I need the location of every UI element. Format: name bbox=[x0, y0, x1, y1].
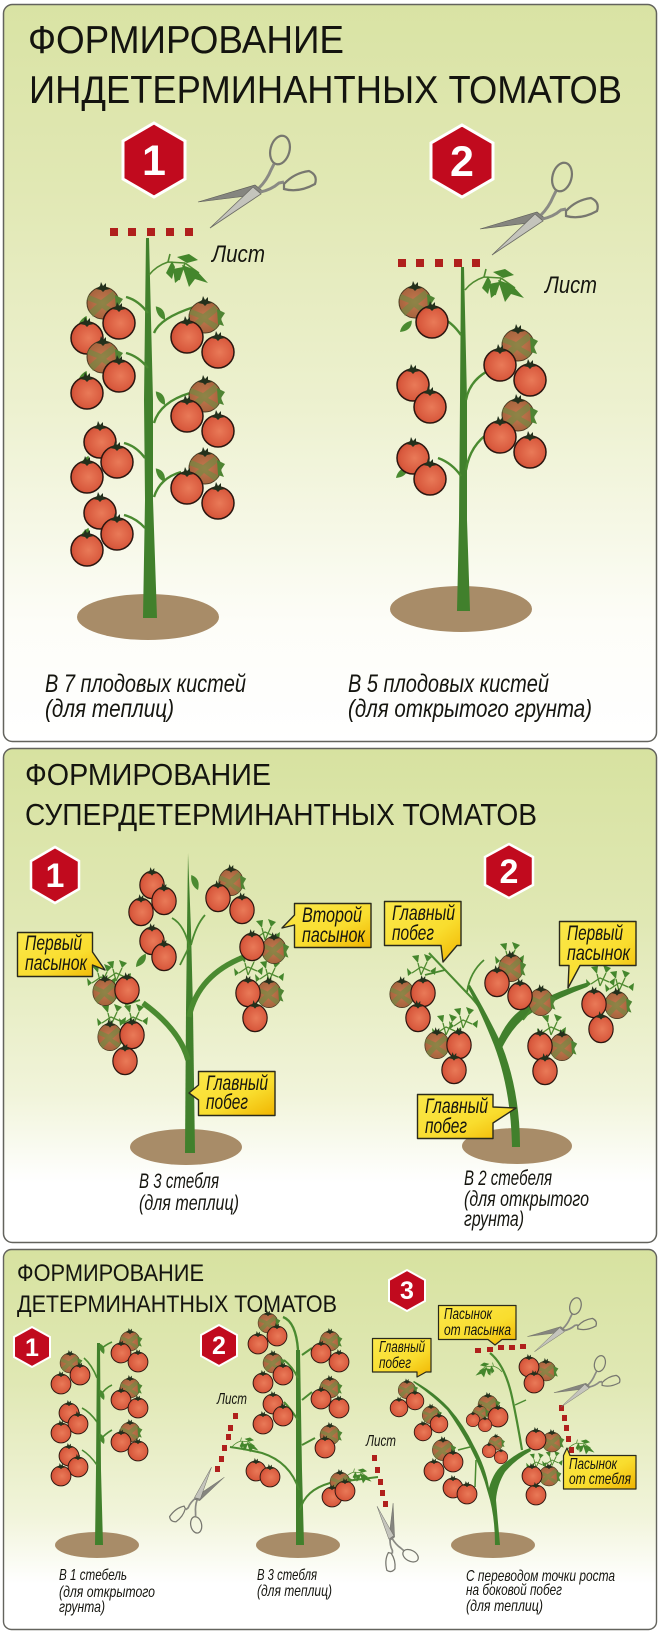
badge 2 bbox=[431, 125, 493, 197]
panel: indeterminate tomatoes bbox=[4, 4, 656, 742]
callout: stepson from stem: от стебля bbox=[569, 1471, 631, 1488]
callout: second stepson: пасынок bbox=[302, 924, 366, 947]
caption 1: В 1 стебель bbox=[59, 1567, 127, 1584]
ground 3 bbox=[451, 1532, 535, 1558]
ground 2 bbox=[462, 1128, 572, 1164]
heading: ДЕТЕРМИНАНТНЫХ ТОМАТОВ bbox=[17, 1291, 337, 1318]
tomatoes right bbox=[484, 324, 546, 468]
badge 2: 2 bbox=[212, 1332, 226, 1360]
plant 2 bbox=[158, 1310, 431, 1578]
heading bbox=[17, 1260, 337, 1318]
callout: stepson from stem: Пасынок bbox=[569, 1456, 618, 1473]
tomatoes left bbox=[397, 281, 448, 495]
leaf bbox=[149, 254, 208, 287]
heading bbox=[25, 757, 537, 832]
scissors 1 bbox=[198, 134, 316, 228]
panel background bbox=[4, 748, 656, 1242]
ground 2 bbox=[390, 586, 532, 632]
callout: main shoot: побег bbox=[206, 1091, 248, 1114]
callout: stepson of stepson: от пасынка bbox=[444, 1322, 511, 1339]
callout: main shoot bbox=[372, 1338, 431, 1377]
callout: first stepson: пасынок bbox=[25, 952, 88, 975]
caption 1: (для открытого bbox=[59, 1584, 155, 1601]
stem and branches bbox=[407, 942, 634, 1147]
badge 2: 2 bbox=[500, 853, 518, 891]
ground 1 bbox=[77, 594, 219, 640]
heading bbox=[28, 19, 622, 112]
tomatoes bbox=[93, 864, 289, 1075]
callout: main shoot bottom: побег bbox=[425, 1115, 467, 1138]
caption 1: В 3 стебля bbox=[139, 1170, 219, 1193]
scissors 2 bbox=[480, 161, 598, 255]
callout: first stepson right: Первый bbox=[567, 922, 623, 945]
caption 1 bbox=[139, 1170, 239, 1215]
badge 2 bbox=[485, 844, 533, 898]
callout: main shoot bottom: Главный bbox=[425, 1095, 488, 1118]
tomatoes bbox=[390, 950, 632, 1085]
cut line 2 bbox=[398, 259, 480, 267]
caption 2 bbox=[348, 670, 592, 723]
badge 1 bbox=[14, 1327, 50, 1367]
callout: main shoot bbox=[189, 1072, 275, 1116]
ground 2 bbox=[256, 1532, 340, 1558]
callout: first stepson bbox=[18, 932, 105, 976]
heading: ФОРМИРОВАНИЕ bbox=[28, 19, 344, 62]
plant 2 bbox=[394, 267, 597, 611]
heading: ФОРМИРОВАНИЕ bbox=[25, 757, 271, 792]
caption 2: В 2 стебеля bbox=[464, 1167, 552, 1190]
badge 3 bbox=[389, 1270, 425, 1311]
panel: determinate tomatoes bbox=[4, 1250, 656, 1630]
tomatoes right bbox=[171, 296, 234, 519]
caption 3 bbox=[466, 1568, 615, 1615]
caption 2: (для открытого грунта) bbox=[348, 695, 592, 723]
badge 2 bbox=[201, 1325, 237, 1366]
plant 1 bbox=[87, 853, 289, 1153]
callout: main shoot top: побег bbox=[392, 922, 434, 945]
callout: first stepson right: пасынок bbox=[567, 942, 631, 965]
badge 1 bbox=[123, 123, 185, 197]
stem and branches bbox=[230, 1317, 378, 1545]
panel: super-determinate tomatoes bbox=[4, 748, 656, 1242]
caption 2 bbox=[257, 1567, 332, 1600]
scissors top bbox=[527, 1296, 596, 1352]
label: leaf left: Лист bbox=[216, 1391, 247, 1408]
cut line right bbox=[372, 1455, 388, 1507]
cut line right bbox=[559, 1405, 574, 1453]
stem and branches bbox=[87, 853, 284, 1153]
heading: ИНДЕТЕРМИНАНТНЫХ ТОМАТОВ bbox=[29, 69, 622, 112]
leaf bbox=[465, 269, 524, 302]
caption 1: В 7 плодовых кистей bbox=[45, 670, 246, 698]
caption 1 bbox=[45, 670, 246, 723]
cut line left bbox=[215, 1413, 238, 1472]
scissors middle bbox=[554, 1354, 620, 1407]
caption 3: на боковой побег bbox=[466, 1582, 562, 1599]
ground 1 bbox=[55, 1532, 139, 1558]
badge 1: 1 bbox=[142, 137, 166, 185]
badge 1: 1 bbox=[25, 1334, 39, 1362]
panel background bbox=[4, 4, 656, 742]
cut line top bbox=[475, 1344, 526, 1353]
plant 1 bbox=[51, 1328, 148, 1545]
badge 1: 1 bbox=[46, 857, 64, 895]
heading: СУПЕРДЕТЕРМИНАНТНЫХ ТОМАТОВ bbox=[25, 797, 537, 832]
callout: second stepson: Второй bbox=[302, 904, 362, 927]
ground 1 bbox=[130, 1129, 242, 1165]
panel background bbox=[4, 1250, 656, 1630]
callout: main shoot bottom bbox=[418, 1094, 516, 1138]
label: leaf: Лист bbox=[210, 241, 265, 268]
callout: main shoot top: Главный bbox=[392, 902, 455, 925]
caption 2: грунта) bbox=[464, 1208, 524, 1231]
caption 1 bbox=[59, 1567, 155, 1616]
badge 1 bbox=[31, 847, 79, 903]
heading: ФОРМИРОВАНИЕ bbox=[17, 1260, 204, 1287]
badge 3: 3 bbox=[400, 1277, 414, 1305]
caption 3: С переводом точки роста bbox=[466, 1568, 615, 1585]
scissors left bbox=[158, 1464, 242, 1542]
tomatoes bbox=[51, 1328, 148, 1486]
caption 1: грунта) bbox=[59, 1599, 105, 1616]
tomatoes bbox=[390, 1354, 564, 1505]
caption 2: (для теплиц) bbox=[257, 1583, 332, 1600]
badge 2: 2 bbox=[450, 138, 474, 186]
caption 3: (для теплиц) bbox=[466, 1598, 543, 1615]
caption 2: (для открытого bbox=[464, 1188, 589, 1211]
callout: first stepson right bbox=[560, 922, 636, 988]
plant 2 bbox=[390, 942, 634, 1147]
caption 1: (для теплиц) bbox=[139, 1192, 239, 1215]
callout: main shoot: Главный bbox=[206, 1072, 268, 1095]
caption 1: (для теплиц) bbox=[45, 695, 174, 723]
label: leaf right: Лист bbox=[365, 1433, 396, 1450]
caption 2: В 3 стебля bbox=[257, 1567, 317, 1584]
tomatoes bbox=[246, 1310, 355, 1507]
scissors right bbox=[362, 1500, 431, 1578]
callout: second stepson bbox=[282, 904, 371, 948]
stem and branches bbox=[82, 1342, 112, 1545]
callout: main shoot: Главный bbox=[379, 1339, 425, 1356]
cut line 1 bbox=[110, 228, 193, 236]
callout: first stepson: Первый bbox=[25, 932, 82, 955]
callout: stepson of stepson: Пасынок bbox=[444, 1306, 493, 1323]
callout: main shoot top bbox=[384, 902, 461, 962]
callout: stepson from stem bbox=[564, 1448, 636, 1489]
stem and branches bbox=[75, 238, 194, 618]
stem and branches bbox=[413, 1353, 595, 1545]
callout: main shoot: побег bbox=[379, 1355, 411, 1372]
caption 2: В 5 плодовых кистей bbox=[348, 670, 549, 698]
tomatoes left bbox=[71, 282, 135, 566]
stem and branches bbox=[394, 267, 494, 611]
plant 3 bbox=[59, 1296, 636, 1616]
caption 2 bbox=[464, 1167, 589, 1231]
callout: stepson of stepson bbox=[438, 1306, 516, 1345]
plant 1 bbox=[71, 238, 265, 618]
label: leaf: Лист bbox=[543, 272, 597, 299]
